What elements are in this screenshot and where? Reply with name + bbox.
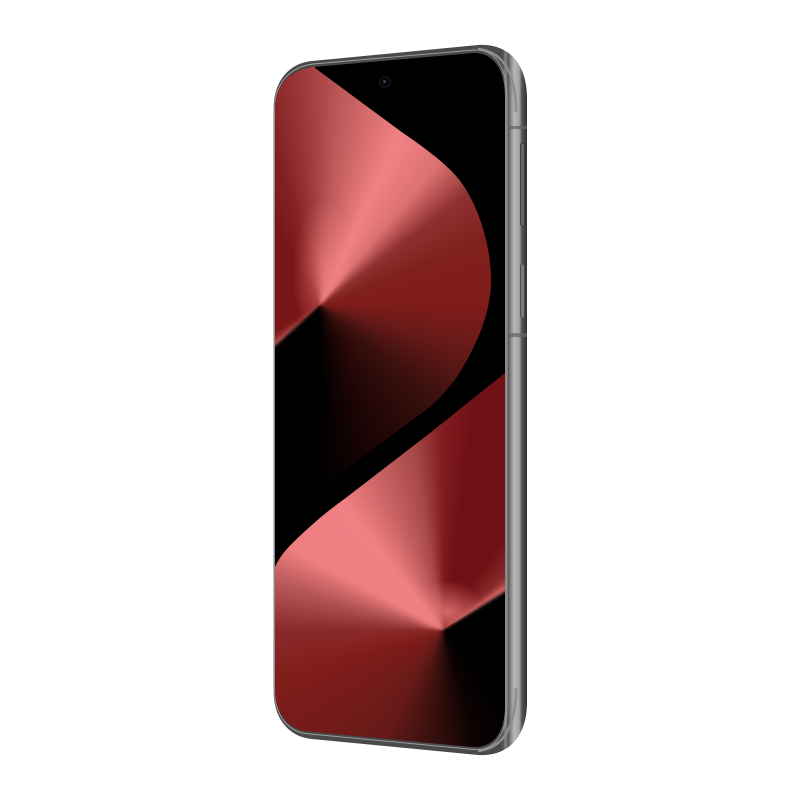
antenna band: top: [508, 126, 527, 129]
wallpaper: lower red shape: [275, 373, 505, 747]
screen: [275, 53, 505, 747]
icon: front camera: [379, 76, 391, 88]
wallpaper: upper red shape: [275, 66, 491, 475]
button: lower side: [520, 264, 524, 318]
antenna band: bottom: [508, 333, 527, 337]
button: upper side: [520, 143, 524, 226]
wallpaper: lower glow: [422, 583, 480, 630]
wallpaper: upper glow: [296, 211, 342, 318]
